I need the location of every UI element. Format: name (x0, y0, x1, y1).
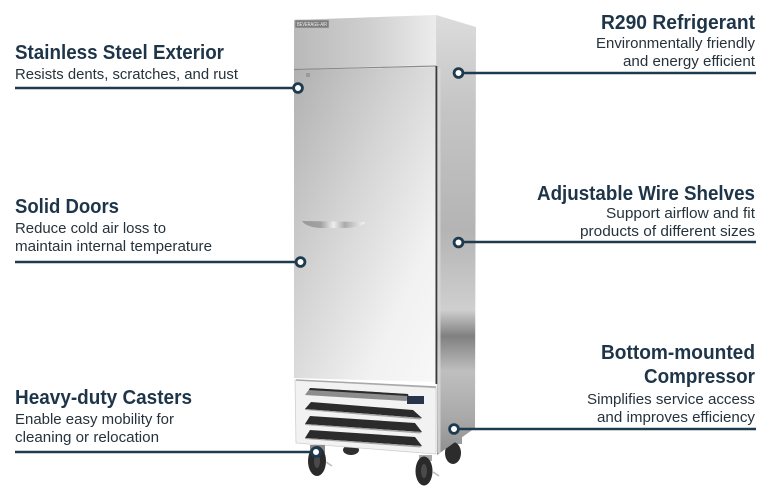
callout: Heavy-duty Casters: Heavy-duty Casters (15, 387, 192, 409)
door top trim (294, 66, 436, 70)
louver slots (305, 388, 422, 448)
callout: R290 Refrigerant: Environmentally friendly (596, 35, 755, 52)
callout: Adjustable Wire Shelves: Adjustable Wire Shelves (537, 183, 755, 205)
caster: front left (308, 445, 332, 476)
callout: Solid Doors: Solid Doors (15, 196, 119, 218)
product image: refrigerator (294, 15, 476, 486)
door handle (302, 221, 365, 228)
callout: Bottom-mounted Compressor (450, 342, 756, 433)
callout: Solid Doors: maintain internal temperature (15, 238, 212, 255)
callout: Stainless Steel Exterior: Stainless Steel Exterior (15, 42, 224, 64)
callout: Solid Doors: Reduce cold air loss to (15, 220, 166, 237)
callout: Bottom-mounted Compressor: and improves efficiency (597, 409, 756, 426)
hinge detail (306, 73, 310, 77)
callout: Heavy-duty Casters: cleaning or relocation (15, 429, 159, 446)
compressor grille housing (295, 380, 436, 454)
caster: rear left (343, 445, 359, 455)
callout: Bottom-mounted Compressor: Simplifies service access (587, 391, 755, 408)
temperature display (407, 396, 424, 404)
callout: Heavy-duty Casters (15, 387, 320, 456)
callout: Adjustable Wire Shelves (454, 183, 756, 247)
grille top lip (296, 380, 436, 387)
callout: R290 Refrigerant (454, 12, 756, 77)
brand plate (295, 20, 329, 28)
callout: Adjustable Wire Shelves: products of different sizes (580, 223, 755, 240)
callout: Bottom-mounted Compressor: Compressor (644, 366, 755, 388)
door (294, 67, 436, 382)
cabinet side panel (436, 15, 476, 455)
caster: rear right (445, 434, 462, 464)
callout: R290 Refrigerant: and energy efficient (623, 53, 756, 70)
side panel front edge (438, 68, 440, 453)
callout: Heavy-duty Casters: Enable easy mobility for (15, 411, 174, 428)
callout: R290 Refrigerant: R290 Refrigerant (601, 12, 755, 34)
callout: Solid Doors (15, 196, 305, 266)
callout: Adjustable Wire Shelves: Support airflow and fit (606, 205, 756, 222)
brand plate: BEVERAGE-AIR (297, 22, 327, 28)
callout: Stainless Steel Exterior: Resists dents, scratches, and rust (15, 66, 239, 83)
top header panel (294, 15, 436, 69)
callout: Stainless Steel Exterior (15, 42, 302, 92)
door gap (436, 66, 437, 384)
callout: Bottom-mounted Compressor: Bottom-mounted (601, 342, 755, 364)
caster: front right (416, 455, 439, 486)
